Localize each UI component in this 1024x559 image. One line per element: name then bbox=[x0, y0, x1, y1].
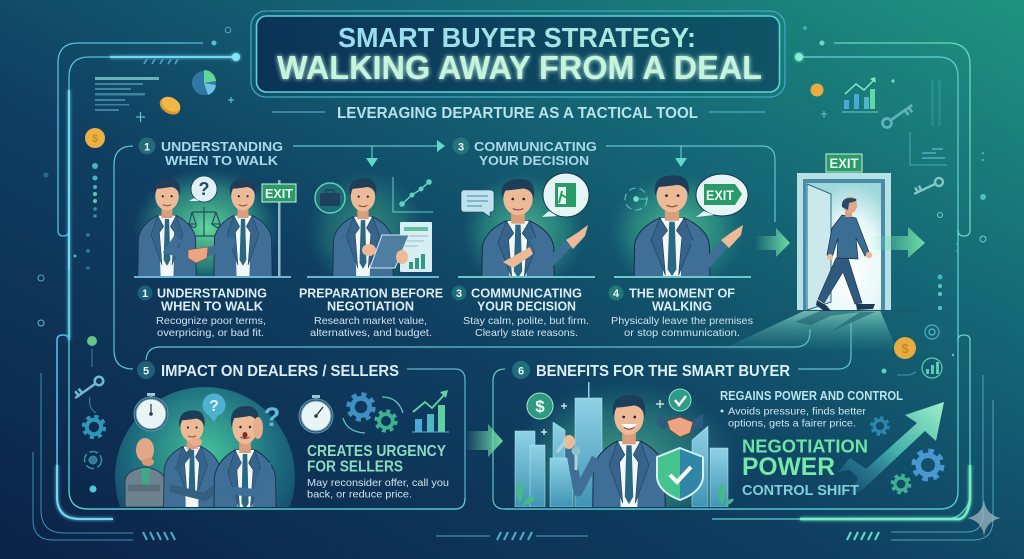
icon: chat bubble bbox=[461, 190, 494, 217]
decorative icons: top right bbox=[795, 26, 986, 280]
icon: tablet bbox=[362, 235, 409, 268]
step 3 label: COMMUNICATING bbox=[471, 286, 582, 300]
icon: key two bbox=[914, 174, 944, 198]
arrow between panels bbox=[465, 424, 503, 457]
icon: gears bbox=[343, 395, 403, 433]
icon: handshake bbox=[657, 414, 703, 437]
decorative dots bbox=[795, 26, 986, 280]
step 2 label: alternatives, and budget. bbox=[310, 327, 432, 339]
icon: question bubble bbox=[202, 394, 226, 422]
callout: regains power and control: options, gets a fairer price. bbox=[728, 418, 856, 430]
icon: question bubble bbox=[189, 176, 217, 202]
icon: stopwatch bbox=[300, 395, 332, 432]
icon: sparkle bbox=[967, 500, 1001, 536]
icon: exit speech bubble: EXIT bbox=[706, 187, 734, 203]
step 3 label: 3 bbox=[456, 288, 462, 300]
icon: key bbox=[75, 377, 103, 398]
panel: communicating your decision bbox=[458, 172, 595, 278]
decorative icons: top left bbox=[38, 27, 240, 326]
step 1 heading: 1 bbox=[144, 142, 150, 154]
icon: question bubble: ? bbox=[209, 398, 219, 415]
illustration: worried sellers bbox=[115, 387, 295, 507]
negotiation power label: NEGOTIATION bbox=[742, 436, 868, 456]
icon: data list bbox=[95, 77, 159, 111]
icon: exit sign bbox=[262, 180, 296, 277]
step 1 label bbox=[138, 286, 267, 339]
icon: dollar coin: $ bbox=[901, 341, 909, 356]
callout: creates urgency: FOR SELLERS bbox=[307, 458, 403, 476]
arrow into door bbox=[755, 228, 790, 257]
arm gesture bbox=[695, 225, 743, 272]
icon: shield bbox=[657, 448, 703, 500]
door frame bbox=[797, 173, 891, 310]
ground line bbox=[458, 276, 595, 278]
sparkles bbox=[541, 400, 664, 435]
icon: gear bbox=[84, 417, 104, 437]
step 3 label bbox=[452, 286, 589, 339]
panel: impact on dealers and sellers bbox=[115, 361, 449, 507]
arrow out of door bbox=[870, 227, 925, 258]
callout: regains power and control: Avoids pressure, finds better bbox=[728, 406, 867, 418]
figure: buyer bbox=[138, 178, 196, 276]
icon: dollar coin bbox=[85, 128, 105, 148]
icon: growth chart bbox=[842, 77, 878, 112]
callout: creates urgency: May reconsider offer, call you bbox=[307, 477, 449, 489]
figure: speaker bbox=[481, 179, 555, 276]
panel: benefits for the smart buyer bbox=[512, 361, 944, 507]
icon: bars circle bbox=[922, 358, 942, 378]
arm gesture bbox=[503, 225, 588, 268]
step 2 label bbox=[299, 286, 443, 339]
door leaf bbox=[807, 184, 831, 310]
title box bbox=[251, 11, 785, 97]
heading: 6 bbox=[518, 366, 524, 378]
callout: regains power and control bbox=[720, 389, 903, 430]
ground line bbox=[307, 276, 439, 278]
icon: dollar badge: $ bbox=[535, 397, 545, 416]
icon: key bbox=[882, 105, 912, 128]
panel: preparation before negotiation bbox=[307, 177, 439, 278]
icon: briefcase bbox=[315, 183, 345, 213]
figure: researcher bbox=[332, 178, 394, 276]
step 4 label: Physically leave the premises bbox=[611, 315, 753, 327]
heading: 5 bbox=[143, 366, 149, 378]
ground line bbox=[614, 276, 751, 278]
step 1 heading bbox=[138, 138, 283, 168]
step 1 label: UNDERSTANDING bbox=[157, 286, 267, 300]
title line two: WALKING AWAY FROM A DEAL bbox=[277, 49, 762, 86]
step 3 heading: 3 bbox=[458, 142, 464, 154]
step 1 label: WHEN TO WALK bbox=[161, 298, 264, 314]
icon: report document bbox=[400, 222, 432, 272]
illustration: smart buyer bbox=[514, 382, 734, 507]
door scene bbox=[720, 154, 925, 350]
icon: dollar coin: $ bbox=[92, 133, 98, 145]
step 4 label: or stop communication. bbox=[624, 327, 740, 339]
step 1 label: overpricing, or bad fit. bbox=[157, 327, 264, 339]
step 4 label: WALKING bbox=[652, 298, 712, 314]
left side icon column bbox=[75, 336, 104, 492]
panel: the moment of walking bbox=[614, 174, 751, 278]
step 4 label bbox=[608, 286, 753, 339]
icon: scales bbox=[189, 207, 220, 236]
figure: shocked seller bbox=[214, 406, 276, 507]
glowing dot bbox=[90, 486, 96, 492]
figure: walking man bbox=[816, 196, 875, 311]
negotiation power label: POWER bbox=[742, 453, 835, 481]
icon: dollar badge bbox=[527, 393, 553, 419]
ground line bbox=[134, 276, 291, 278]
negotiation power label: CONTROL SHIFT bbox=[742, 483, 859, 499]
step 2 label: Research market value, bbox=[314, 315, 427, 327]
light beam bbox=[720, 310, 897, 350]
step 3 label: YOUR DECISION bbox=[477, 298, 576, 314]
figure: thinking seller bbox=[163, 410, 219, 507]
exit sign bbox=[826, 154, 862, 172]
icon: growth bars bbox=[412, 390, 449, 432]
icon: exit speech bubble bbox=[696, 174, 748, 217]
negotiation power label bbox=[742, 436, 868, 499]
city skyline bbox=[515, 398, 728, 507]
decorative dots bbox=[44, 40, 240, 270]
step 2 label: NEGOTIATION bbox=[327, 298, 414, 314]
flow connector lines bbox=[114, 140, 851, 509]
icon: stopwatch bbox=[135, 393, 167, 430]
step 1 label: Recognize poor terms, bbox=[156, 315, 266, 327]
callout: creates urgency: CREATES URGENCY bbox=[307, 443, 447, 460]
icon: exit sign: EXIT bbox=[265, 186, 293, 201]
step 4 label: 4 bbox=[613, 288, 620, 300]
icon: pie chart bbox=[192, 70, 216, 95]
icon: line chart bbox=[393, 177, 433, 212]
step 4 label: THE MOMENT OF bbox=[629, 286, 735, 300]
icon: plants bbox=[516, 480, 734, 505]
right side icon column bbox=[882, 284, 954, 378]
icon: coin bbox=[157, 93, 184, 118]
figure: happy buyer bbox=[592, 395, 666, 507]
callout: creates urgency bbox=[307, 443, 449, 500]
icon: coin bbox=[810, 84, 824, 96]
step 3 heading: COMMUNICATING bbox=[474, 139, 597, 154]
icon: check badge bbox=[669, 389, 691, 411]
exit sign: EXIT bbox=[830, 156, 859, 171]
raised arm with keys bbox=[557, 435, 596, 492]
step 1 heading: WHEN TO WALK bbox=[165, 153, 279, 168]
icon: target bbox=[84, 452, 102, 468]
step 3 label: Clearly state reasons. bbox=[475, 327, 578, 339]
icons: gears bbox=[872, 418, 942, 492]
icon: exit speech bubble bbox=[542, 173, 589, 217]
step 2 label: PREPARATION BEFORE bbox=[299, 286, 443, 300]
subtitle: LEVERAGING DEPARTURE AS A TACTICAL TOOL bbox=[337, 105, 698, 122]
step 1 heading: UNDERSTANDING bbox=[161, 139, 283, 154]
icon: handshake bbox=[170, 238, 232, 263]
icon: target bbox=[925, 325, 939, 339]
chart: rising arrow bbox=[838, 402, 944, 495]
callout: regains power and control: REGAINS POWER AND CONTROL bbox=[720, 389, 903, 403]
icon: dial bbox=[625, 188, 648, 210]
step 3 heading bbox=[452, 138, 597, 168]
icon: small chart axes bbox=[910, 132, 947, 165]
step 3 label: Stay calm, polite, but firm. bbox=[463, 315, 589, 327]
callout: creates urgency: back, or reduce price. bbox=[307, 488, 412, 500]
figure: presenter bbox=[634, 175, 710, 276]
figure: bald seller bbox=[125, 438, 165, 507]
title line one: SMART BUYER STRATEGY: bbox=[338, 22, 696, 53]
icon: question bubble: ? bbox=[198, 179, 210, 199]
figure: seller bbox=[214, 178, 272, 276]
panel: understanding when to walk bbox=[134, 172, 296, 278]
step 1 label: 1 bbox=[142, 288, 148, 300]
icon: question mark: ? bbox=[264, 402, 280, 432]
step 3 heading: YOUR DECISION bbox=[479, 153, 589, 168]
heading: BENEFITS FOR THE SMART BUYER bbox=[536, 363, 790, 380]
heading: IMPACT ON DEALERS / SELLERS bbox=[161, 363, 399, 380]
